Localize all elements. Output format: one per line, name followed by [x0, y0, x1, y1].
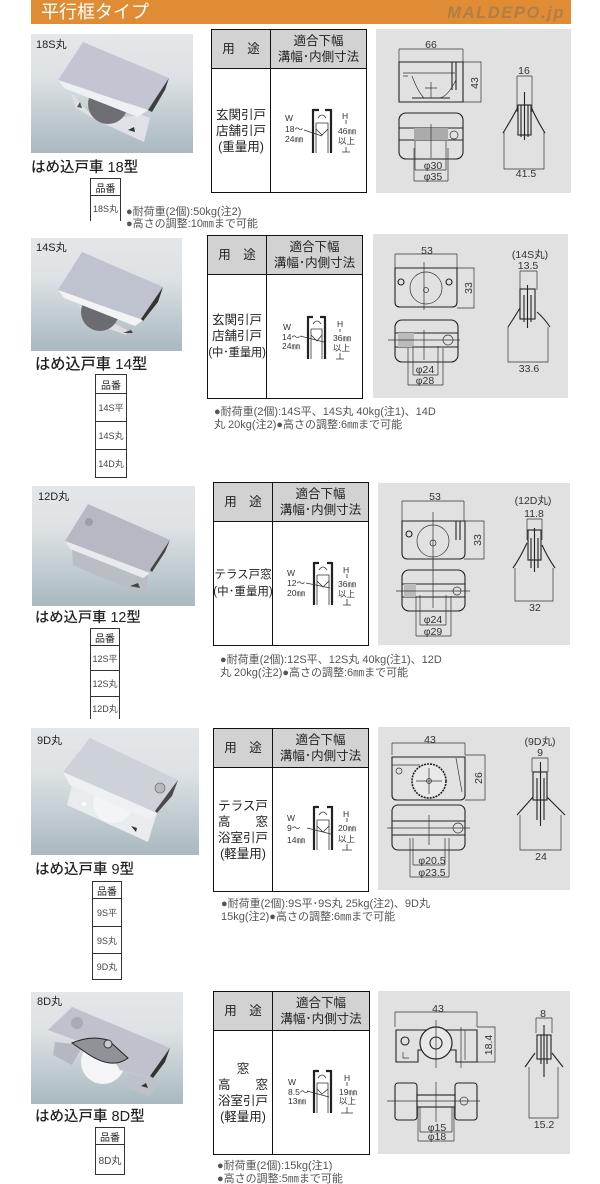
- part number table: 14型: 品番: [101, 380, 121, 392]
- bottom view: [388, 320, 460, 387]
- dimension drawing: 12型: [378, 483, 570, 645]
- spec notes: 14型: 丸 20kg(注2)●高さの調整:6㎜まで可能: [214, 419, 402, 431]
- column header: 用途: [214, 729, 273, 768]
- column header: 用途: [212, 30, 271, 69]
- column header: 適合下幅: 適合下幅: [293, 34, 344, 48]
- top view: 43: [469, 77, 481, 89]
- side view: 15.2: [534, 1119, 554, 1131]
- side view: 41.5: [516, 168, 536, 180]
- top view: 26: [473, 772, 485, 784]
- product title: 14型: はめ込戸車 14型: [35, 356, 147, 373]
- channel diagram: 18～: [284, 124, 303, 134]
- column header: 用途: 用 途: [224, 741, 262, 755]
- usage text: (中･重量用): [208, 347, 266, 359]
- spec notes: 14型: [214, 406, 436, 431]
- top view: 18.4: [483, 1035, 495, 1055]
- channel diagram: 以上: [338, 588, 355, 598]
- part number table: 18型: [90, 178, 121, 221]
- side view: [508, 248, 550, 375]
- side view: 33.6: [519, 363, 539, 375]
- column header: 適合下幅: 適合下幅: [289, 240, 340, 254]
- photo: 18S丸: 18S丸: [36, 38, 67, 51]
- dimension drawing: 18型: [376, 29, 571, 193]
- side view: 13.5: [518, 260, 538, 272]
- channel diagram: W: [286, 812, 295, 822]
- spec notes: 9型: ●耐荷重(2個):9S平･9S丸 25kg(注2)、9D丸: [221, 898, 430, 910]
- bottom view: φ20.5: [418, 855, 446, 867]
- photo: 8D丸: 8D丸: [37, 995, 62, 1008]
- channel diagram: 以上: [338, 1096, 356, 1106]
- side view: (14S丸): [512, 248, 548, 261]
- column header: 適合下幅: [271, 30, 366, 69]
- channel diagram: [286, 562, 356, 606]
- usage text: [214, 768, 273, 891]
- usage text: 玄関引戸: [212, 313, 262, 327]
- side view: 32: [529, 602, 541, 614]
- column header: 適合下幅: 適合下幅: [295, 733, 346, 747]
- part number table: 14型: 14S丸: [98, 431, 124, 441]
- usage table: 12型: [213, 482, 369, 646]
- column header: 用途: 用 途: [222, 42, 260, 56]
- side view: 9: [537, 747, 543, 759]
- usage text: 店舗引戸: [216, 124, 266, 138]
- top view: [402, 491, 484, 568]
- top view: 53: [421, 245, 433, 257]
- spec notes: 9型: 15kg(注2)●高さの調整:6㎜まで可能: [221, 911, 395, 923]
- part number table: 8D型: [95, 1127, 125, 1175]
- side view: [503, 65, 545, 180]
- dimension drawing: 8D型: [378, 991, 570, 1154]
- side view: [525, 1008, 563, 1131]
- usage text: (中･重量用): [213, 586, 273, 598]
- top view: [392, 734, 485, 800]
- top view: [399, 39, 481, 102]
- channel diagram: 12～: [286, 578, 305, 588]
- column header: 適合下幅: 溝幅･内側寸法: [280, 503, 361, 517]
- product title: 18型: はめ込戸車 18型: [31, 160, 138, 176]
- bottom view: φ28: [416, 375, 434, 387]
- part number table: 14型: [95, 374, 127, 478]
- heading: 平行框タイプ: 平行框タイプ: [41, 2, 149, 22]
- bottom view: φ18: [428, 1131, 446, 1143]
- column header: 用途: 用 途: [218, 248, 256, 262]
- spec notes: 18型: ●耐荷重(2個):50kg(注2): [126, 206, 241, 218]
- channel diagram: H: [342, 564, 349, 574]
- top view: 33: [472, 534, 484, 546]
- usage text: (軽量用): [220, 1110, 266, 1124]
- bottom view: φ15: [428, 1122, 446, 1134]
- channel diagram: [288, 1070, 357, 1114]
- column header: 用途: [214, 483, 273, 522]
- side view: 11.8: [524, 508, 544, 520]
- usage text: 高 窓: [218, 814, 268, 828]
- spec notes: 12型: 丸 20kg(注2)●高さの調整:6㎜まで可能: [220, 666, 408, 678]
- channel diagram: 24㎜: [282, 340, 300, 350]
- usage text: 高 窓: [218, 1078, 268, 1092]
- photo: 14S丸: [31, 238, 182, 351]
- bottom view: [399, 113, 463, 183]
- bottom view: [396, 560, 470, 638]
- bottom view: φ30: [424, 160, 442, 172]
- dimension drawing: 9型: [378, 727, 570, 890]
- channel diagram: 20㎜: [338, 822, 356, 832]
- part number table: 8D型: 8D丸: [99, 1156, 121, 1167]
- channel diagram: 13㎜: [288, 1096, 306, 1106]
- part number table: 12型: 12D丸: [92, 704, 118, 714]
- column header: 適合下幅: 溝幅･内側寸法: [280, 749, 361, 763]
- column header: 用途: [208, 236, 267, 275]
- watermark: MALDEPO.jp: [447, 4, 565, 22]
- usage table: 14型: [207, 235, 363, 399]
- column header: 適合下幅: [273, 992, 369, 1031]
- channel diagram: 14～: [282, 332, 300, 342]
- part number table: 14型: 14S平: [98, 403, 124, 413]
- spec notes: 12型: [220, 654, 442, 678]
- spec notes: 14型: ●耐荷重(2個):14S平、14S丸 40kg(注1)、14D: [214, 406, 436, 418]
- column header: 適合下幅: [267, 236, 362, 275]
- top view: 53: [429, 491, 441, 503]
- photo: 12D丸: 12D丸: [38, 490, 69, 503]
- part number table: 12型: 12S平: [92, 654, 118, 664]
- channel diagram: 20㎜: [286, 588, 305, 598]
- photo: 8D丸: [31, 992, 183, 1104]
- side view: (12D丸): [515, 494, 551, 507]
- column header: 用途: 用 途: [224, 1004, 262, 1018]
- channel diagram: 8.5～: [288, 1086, 308, 1096]
- photo: 12D丸: [32, 486, 195, 606]
- part number table: 12型: 12S丸: [92, 679, 118, 689]
- top view: [395, 1003, 495, 1068]
- usage table: 9型: [213, 728, 369, 892]
- usage text: 浴室引戸: [218, 1094, 268, 1108]
- spec notes: 18型: ●高さの調整:10㎜まで可能: [126, 218, 258, 230]
- top view: 43: [424, 734, 436, 746]
- channel diagram: 以上: [332, 342, 350, 352]
- channel diagram: 以上: [338, 834, 355, 844]
- part number table: 8D型: 品番: [100, 1132, 120, 1144]
- top view: [395, 245, 475, 310]
- spec notes: 12型: ●耐荷重(2個):12S平、12S丸 40kg(注1)、12D: [220, 654, 442, 666]
- side view: 8: [540, 1008, 546, 1020]
- channel diagram: H: [344, 1072, 350, 1082]
- column header: 適合下幅: [273, 729, 368, 768]
- photo: 9D丸: [31, 728, 199, 855]
- part number table: 14型: 14D丸: [98, 459, 124, 469]
- channel diagram: [284, 108, 356, 153]
- usage text: 窓: [237, 1062, 249, 1076]
- channel diagram: W: [284, 112, 293, 122]
- usage text: 店舗引戸: [212, 329, 262, 343]
- spec notes: 8D型: [217, 1160, 343, 1184]
- column header: 適合下幅: [273, 483, 368, 522]
- channel diagram: 以上: [338, 136, 355, 146]
- usage text: [212, 69, 271, 192]
- side view: 24: [535, 851, 547, 863]
- photo: 18S丸: [31, 34, 193, 153]
- part number table: 12型: [90, 628, 120, 719]
- part number table: 9型: 品番: [97, 886, 117, 898]
- part number table: 18型: 品番: [96, 184, 116, 194]
- channel diagram: 9～: [286, 822, 300, 832]
- channel diagram: [282, 316, 351, 360]
- product title: 8D型: はめ込戸車 8D型: [35, 1109, 145, 1125]
- usage text: [214, 522, 273, 645]
- product title: 12型: はめ込戸車 12型: [35, 610, 141, 626]
- spec notes: 9型: [221, 898, 430, 923]
- channel diagram: 46㎜: [338, 126, 356, 136]
- usage table: 8D型: [213, 991, 370, 1155]
- channel diagram: W: [288, 1076, 296, 1086]
- top view: 66: [425, 39, 437, 51]
- top view: 33: [463, 282, 475, 294]
- top view: 43: [432, 1003, 444, 1015]
- dimension drawing: 14型: [373, 234, 568, 398]
- bottom view: φ29: [424, 626, 442, 638]
- column header: 適合下幅: 適合下幅: [295, 487, 346, 501]
- channel diagram: 36㎜: [332, 332, 351, 342]
- bottom view: φ24: [416, 364, 434, 376]
- part number table: 18型: 18S丸: [93, 204, 118, 214]
- photo: 14S丸: 14S丸: [36, 241, 67, 254]
- side view: [513, 494, 555, 614]
- channel diagram: 24㎜: [284, 134, 303, 144]
- channel diagram: H: [342, 110, 348, 120]
- usage text: 玄関引戸: [216, 108, 266, 122]
- bottom view: φ23.5: [418, 867, 446, 879]
- bottom view: [387, 805, 470, 879]
- usage text: (軽量用): [220, 846, 266, 860]
- usage text: [214, 1031, 273, 1154]
- channel diagram: H: [342, 808, 349, 818]
- usage table: 18型: [211, 29, 367, 193]
- usage text: テラス戸窓: [214, 568, 272, 580]
- column header: 適合下幅: 溝幅･内側寸法: [280, 1012, 362, 1026]
- column header: 適合下幅: 溝幅･内側寸法: [274, 256, 355, 270]
- usage text: テラス戸: [218, 798, 268, 812]
- side view: [517, 735, 565, 863]
- channel diagram: [286, 806, 356, 850]
- usage text: 浴室引戸: [218, 830, 268, 844]
- column header: 用途: [214, 992, 273, 1031]
- spec notes: 18型: [126, 206, 258, 230]
- channel diagram: W: [282, 322, 291, 332]
- header banner: [31, 0, 571, 24]
- channel diagram: W: [286, 568, 295, 578]
- part number table: 9型: 9S平: [97, 908, 117, 918]
- spec notes: 8D型: ●耐荷重(2個):15kg(注1): [217, 1160, 332, 1172]
- bottom view: φ35: [424, 171, 442, 183]
- part number table: 9型: 9D丸: [97, 962, 117, 972]
- part number table: 12型: 品番: [95, 634, 115, 644]
- channel diagram: H: [336, 318, 343, 328]
- column header: 適合下幅: 溝幅･内側寸法: [278, 50, 359, 64]
- side view: (9D丸): [525, 735, 555, 748]
- channel diagram: 36㎜: [338, 578, 356, 588]
- usage text: (重量用): [218, 140, 264, 154]
- column header: 用途: 用 途: [224, 495, 262, 509]
- bottom view: φ24: [424, 614, 442, 626]
- bottom view: [387, 1082, 480, 1143]
- side view: 16: [518, 65, 530, 77]
- product title: 9型: はめ込戸車 9型: [35, 862, 134, 878]
- channel diagram: 19㎜: [338, 1086, 357, 1096]
- usage text: [208, 275, 267, 398]
- part number table: 9型: [92, 881, 122, 980]
- column header: 適合下幅: 適合下幅: [296, 996, 346, 1010]
- part number table: 9型: 9S丸: [97, 936, 117, 946]
- photo: 9D丸: 9D丸: [37, 734, 62, 747]
- channel diagram: 14㎜: [286, 834, 305, 844]
